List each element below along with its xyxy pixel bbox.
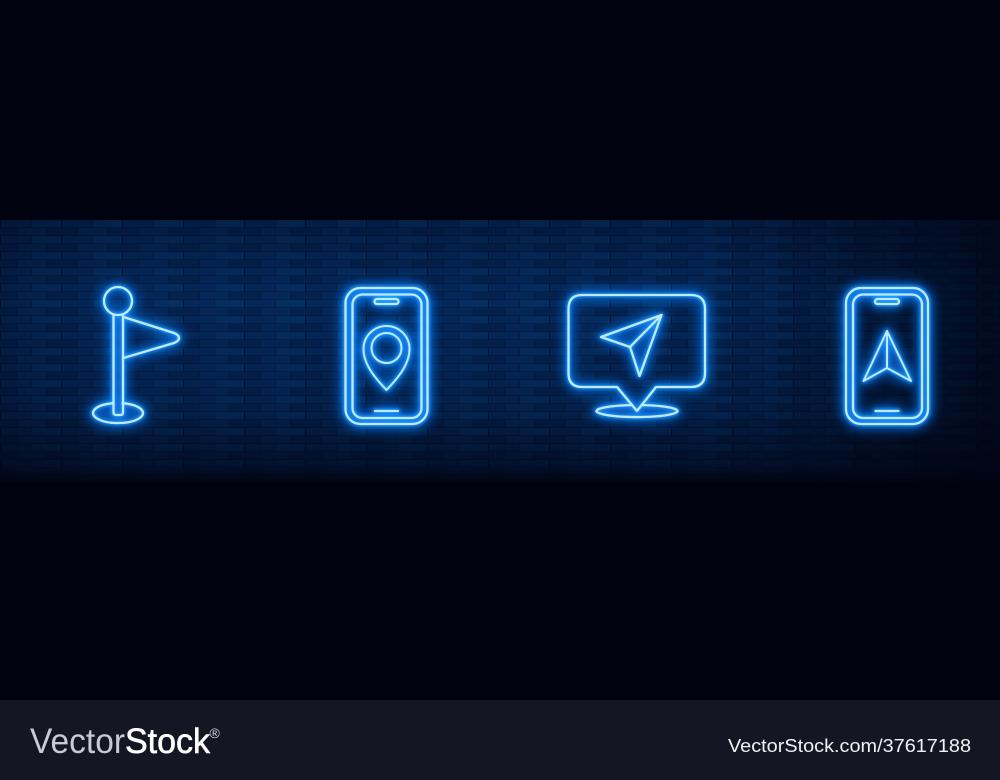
icon: navigation arrow inside phone — [864, 331, 911, 381]
footer logo — [30, 722, 210, 761]
registered mark: ® — [210, 725, 220, 741]
footer image id: VectorStock.com/37617188 — [728, 736, 971, 756]
icon: flag on a round base — [93, 287, 179, 423]
icon: smartphone with location pin — [346, 288, 428, 424]
footer logo: Stock — [125, 722, 210, 761]
footer logo: Vector — [30, 722, 125, 761]
icon: smartphone with navigation arrow — [846, 288, 928, 424]
footer bar — [0, 700, 1000, 780]
icon: speech bubble with navigation arrow — [568, 295, 705, 417]
brick wall band — [0, 220, 1000, 482]
